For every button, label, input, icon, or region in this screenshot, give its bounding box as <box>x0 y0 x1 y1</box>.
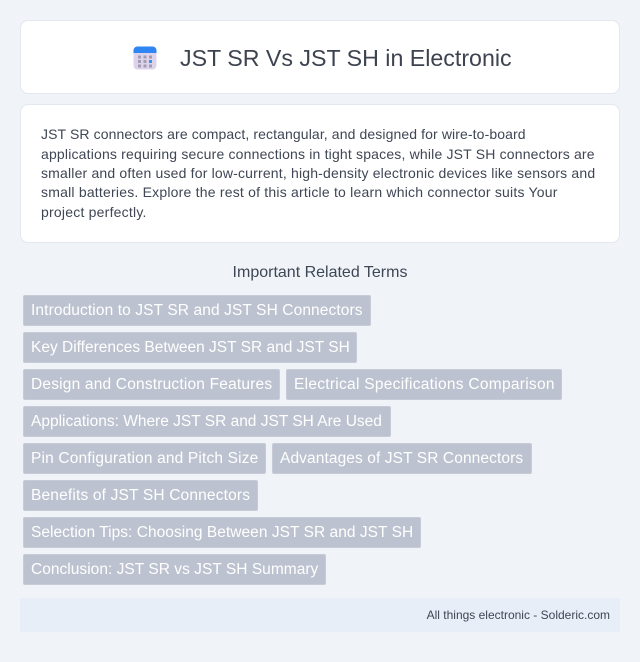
intro text: applications requiring secure connections in tight spaces, while JST SH connectors are <box>41 146 595 162</box>
tag list: Pin Configuration and Pitch Size <box>31 450 258 467</box>
intro text: project perfectly. <box>41 204 147 220</box>
tag list: Electrical Specifications Comparison <box>294 376 555 393</box>
tag list <box>23 295 562 585</box>
tag list: Benefits of JST SH Connectors <box>31 487 250 504</box>
icon: calendar <box>134 46 156 70</box>
footer <box>20 598 620 632</box>
heading: related terms: Important Related Terms <box>233 264 407 281</box>
intro text: JST SR connectors are compact, rectangular, and designed for wire-to-board <box>41 126 526 142</box>
tag list: Selection Tips: Choosing Between JST SR and JST SH <box>31 524 413 541</box>
title: JST SR Vs JST SH in Electronic <box>180 45 512 71</box>
tag list: Key Differences Between JST SR and JST SH <box>31 339 350 356</box>
intro text: smaller and often used for low-current, high-density electronic devices like sensors and <box>41 165 595 181</box>
tag list: Advantages of JST SR Connectors <box>280 450 523 467</box>
tag list: Introduction to JST SR and JST SH Connectors <box>31 302 363 319</box>
tag list: Applications: Where JST SR and JST SH Are Used <box>31 413 382 430</box>
intro text: small batteries. Explore the rest of this article to learn which connector suits Your <box>41 184 558 200</box>
tag list: Design and Construction Features <box>31 376 272 393</box>
footer text: All things electronic - Solderic.com <box>427 608 610 622</box>
title card <box>20 20 620 94</box>
intro text card <box>20 104 620 243</box>
tag list: Conclusion: JST SR vs JST SH Summary <box>31 561 318 578</box>
intro text <box>41 126 595 220</box>
